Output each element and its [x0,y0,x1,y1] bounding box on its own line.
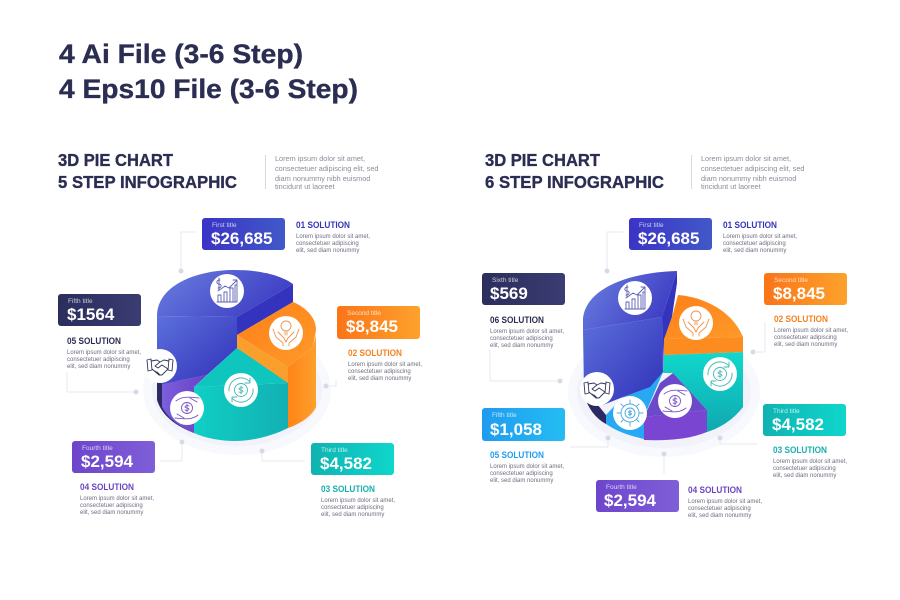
text: 05 solution: elit, sed diam nonummy [67,364,130,370]
card: first: $26,685 [638,229,699,248]
text: 04 solution: Lorem ipsum dolor sit amet, [80,496,154,502]
slice: second orange top [664,295,743,339]
slice: fourth purple top [644,373,707,417]
icon: hands [679,306,713,340]
intro text: 6 step: consectetuer adipiscing elit, sed [701,164,804,173]
card: fifth: $1,058 [490,420,542,439]
icon: chart [618,281,652,315]
icon: hand dollar [658,384,692,418]
slice: third teal front [194,383,288,441]
text: 02 solution [774,313,848,348]
text: 05 solution [490,449,564,484]
text: 06 solution: 06 SOLUTION [490,314,544,325]
card: fifth: Fifth title [68,298,93,305]
text: 04 solution: Lorem ipsum dolor sit amet, [688,499,762,505]
slice: first blue top [157,270,293,317]
heading: 5 step: 5 STEP INFOGRAPHIC [58,172,237,192]
card: first: First title [212,222,237,229]
card: first: $26,685 [211,229,272,248]
text: 01 solution: consectetuer adipiscing [723,241,786,247]
intro text: 5 step: tincidunt ut laoreet [275,182,335,191]
slice: first blue top [583,271,677,330]
slice: sixth dark [584,388,606,424]
text: 01 solution: Lorem ipsum dolor sit amet, [723,234,797,240]
text: 03 solution: Lorem ipsum dolor sit amet, [773,459,847,465]
intro text: 5 step: diam nonummy nibh euismod [275,174,370,183]
base halo: 5 step [143,325,331,455]
icon: dollar cycle [224,373,258,407]
slice: second orange side [664,337,743,355]
intro text: 5 step [265,154,378,191]
card: second: Second title [347,310,381,317]
text: 03 solution [773,444,847,479]
text: 04 solution: elit, sed diam nonummy [80,510,143,516]
text: 03 solution: 03 SOLUTION [773,444,827,455]
text: 02 solution: Lorem ipsum dolor sit amet, [348,362,422,368]
card: fourth [72,441,155,473]
icon: hands [269,316,303,350]
intro text: 6 step: Lorem ipsum dolor sit amet, [701,154,791,163]
card: third [763,404,846,436]
connectors: 6 step [490,232,765,474]
panel: 6 step infographic [482,150,848,519]
pie chart: 5 step [157,270,316,441]
text: 02 solution: consectetuer adipiscing [774,335,837,341]
pie chart: 6 step [583,271,743,440]
text: 03 solution: 03 SOLUTION [321,483,375,494]
slice: fifth dark [157,378,194,433]
card: fifth [482,408,565,441]
heading: 6 step [485,150,664,192]
text: 06 solution: Lorem ipsum dolor sit amet, [490,329,564,335]
text: 01 solution: consectetuer adipiscing [296,241,359,247]
icon: hand dollar [170,391,204,425]
card: second: $8,845 [346,317,398,336]
card: second: $8,845 [773,284,825,303]
text: 03 solution: elit, sed diam nonummy [321,512,384,518]
text: 05 solution: 05 SOLUTION [67,335,121,346]
text: 04 solution: consectetuer adipiscing [80,503,143,509]
card: second [764,273,847,305]
base halo: 6 step [568,327,760,457]
icon: chart [210,274,244,308]
text: 05 solution: Lorem ipsum dolor sit amet, [490,464,564,470]
text: 05 solution: consectetuer adipiscing [67,357,130,363]
intro text: 5 step: Lorem ipsum dolor sit amet, [275,154,365,163]
card: second [337,306,420,339]
text: 02 solution: 02 SOLUTION [348,347,402,358]
text: 02 solution: Lorem ipsum dolor sit amet, [774,328,848,334]
card: third: $4,582 [320,454,372,473]
heading: 6 step: 3D PIE CHART [485,150,600,170]
text: 03 solution: elit, sed diam nonummy [773,473,836,479]
intro text: 6 step: tincidunt ut laoreet [701,182,761,191]
text: 01 solution: 01 SOLUTION [723,219,777,230]
title [59,39,358,104]
intro text: 6 step [691,154,804,191]
card: sixth: Sixth title [492,277,519,284]
text: 06 solution: elit, sed diam nonummy [490,343,553,349]
text: 01 solution [296,219,370,254]
heading: 6 step: 6 STEP INFOGRAPHIC [485,172,664,192]
icon: dollar cycle [703,357,737,391]
slice: third teal [663,352,743,432]
text: 01 solution: elit, sed diam nonummy [723,248,786,254]
icon: handshake [580,372,614,406]
card: fifth: Fifth title [492,412,517,419]
text: 04 solution: 04 SOLUTION [80,481,134,492]
text: 06 solution [490,314,564,349]
card: third: Third title [321,447,348,454]
card: third: Third title [773,408,800,415]
text: 05 solution: Lorem ipsum dolor sit amet, [67,350,141,356]
text: 01 solution [723,219,797,254]
text: 04 solution: consectetuer adipiscing [688,506,751,512]
slice: third teal top [194,348,288,387]
slice: second orange inner [237,335,288,385]
card: fourth [596,480,679,512]
card: fifth: $1564 [67,305,115,324]
text: 01 solution: Lorem ipsum dolor sit amet, [296,234,370,240]
text: 06 solution: consectetuer adipiscing [490,336,553,342]
text: 03 solution: Lorem ipsum dolor sit amet, [321,498,395,504]
card: fourth: $2,594 [81,452,134,471]
text: 05 solution: 05 SOLUTION [490,449,544,460]
title: 4 Eps10 File (3-6 Step) [59,74,358,104]
slice: first blue side [662,271,677,372]
card: third [311,443,394,475]
text: 03 solution: consectetuer adipiscing [321,505,384,511]
text: 03 solution [321,483,395,518]
title: 4 Ai File (3-6 Step) [59,39,303,69]
slice: first blue side [237,284,293,335]
card: fifth [58,294,141,326]
intro text: 5 step: consectetuer adipiscing elit, sed [275,164,378,173]
slice: first blue front [157,316,237,384]
slice: fourth purple front [644,410,707,440]
card: fourth: Fourth title [82,445,113,452]
icon: gear [613,396,647,430]
text: 03 solution: consectetuer adipiscing [773,466,836,472]
heading: 5 step: 3D PIE CHART [58,150,173,170]
slice: fifth sky [606,372,663,439]
card: first [202,218,285,250]
slice: first blue front [583,317,663,405]
card: fourth: $2,594 [604,491,657,510]
text: 02 solution: elit, sed diam nonummy [774,342,837,348]
card: first [629,218,712,250]
card: third: $4,582 [772,415,824,434]
slice: fourth purple [162,375,207,433]
text: 04 solution [80,481,154,516]
text: 04 solution: elit, sed diam nonummy [688,513,751,519]
text: 05 solution: elit, sed diam nonummy [490,478,553,484]
intro text: 6 step: diam nonummy nibh euismod [701,174,796,183]
heading: 5 step [58,150,237,192]
icon: handshake [143,349,177,383]
text: 02 solution: elit, sed diam nonummy [348,376,411,382]
text: 05 solution [67,335,141,370]
card: fourth: Fourth title [606,484,637,491]
text: 01 solution: 01 SOLUTION [296,219,350,230]
text: 02 solution: 02 SOLUTION [774,313,828,324]
text: 05 solution: consectetuer adipiscing [490,471,553,477]
text: 02 solution: consectetuer adipiscing [348,369,411,375]
connectors: 5 step [67,232,336,461]
text: 04 solution: 04 SOLUTION [688,484,742,495]
text: 01 solution: elit, sed diam nonummy [296,248,359,254]
card: sixth [482,273,565,305]
text: 02 solution [348,347,422,382]
text: 04 solution [688,484,762,519]
panel: 5 step infographic [58,150,422,518]
card: second: Second title [774,277,808,284]
card: first: First title [639,222,664,229]
slice: second orange top [237,302,316,367]
card: sixth: $569 [490,284,528,303]
slice: second orange outer [288,335,316,428]
